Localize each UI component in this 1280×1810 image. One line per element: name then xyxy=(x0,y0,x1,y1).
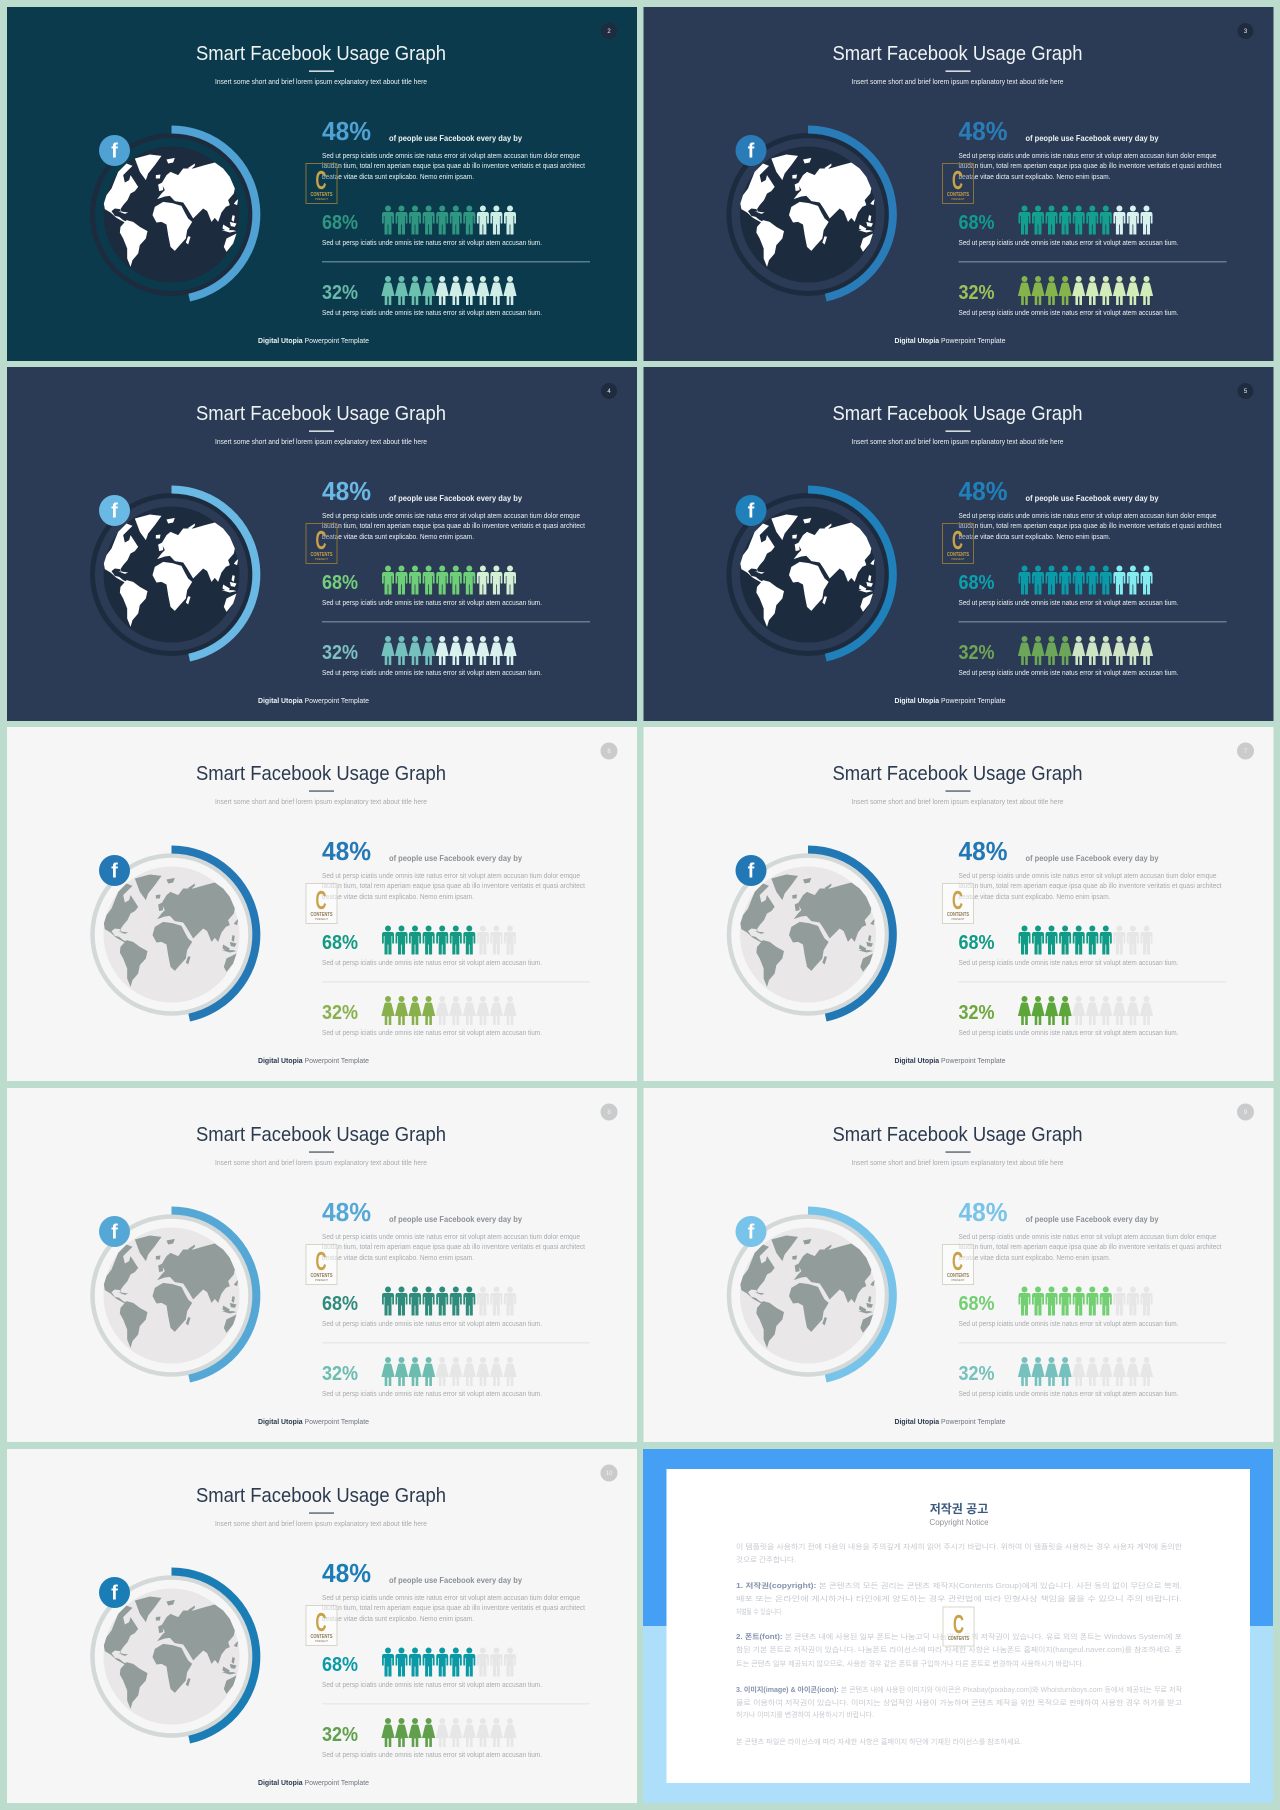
watermark logo: C xyxy=(316,1246,327,1276)
male pictogram row xyxy=(1018,206,1152,234)
32 percent figure: 32% xyxy=(958,1363,995,1385)
male pictogram row xyxy=(1018,926,1152,954)
watermark logo: CONTENTS xyxy=(310,552,333,558)
32 percent caption: Sed ut persp iciatis unde omnis iste natus error sit volupt atem accusan tium. xyxy=(958,1391,1179,1398)
32 percent figure: 32% xyxy=(322,282,358,304)
male pictogram row xyxy=(382,926,516,954)
female pictogram row xyxy=(1018,996,1153,1025)
page number badge: 7 xyxy=(1244,749,1248,755)
subtitle: Insert some short and brief lorem ipsum explanatory text about title here xyxy=(215,1521,427,1528)
footer: Digital Utopia Powerpoint Template xyxy=(894,698,1006,705)
globe donut chart with facebook badge: f xyxy=(748,1222,755,1244)
footer: Digital Utopia Powerpoint Template xyxy=(894,1058,1006,1065)
body paragraph: Sed ut persp iciatis unde omnis iste natus error sit volupt atem accusan tium dolor emque xyxy=(322,513,580,520)
female pictogram row xyxy=(381,1718,517,1747)
body paragraph: beatae vitae dicta sunt explicabo. Nemo enim ipsam. xyxy=(322,174,474,181)
headline: of people use Facebook every day by xyxy=(389,1576,523,1585)
body paragraph xyxy=(322,873,585,901)
watermark logo: PRESENT xyxy=(952,557,965,561)
68 percent figure: 68% xyxy=(322,1654,358,1676)
watermark logo: C xyxy=(952,165,963,195)
title: Smart Facebook Usage Graph xyxy=(196,43,446,65)
globe donut chart with facebook badge: f xyxy=(111,1222,118,1244)
male pictogram row xyxy=(382,1648,516,1676)
page number badge: 3 xyxy=(1244,29,1248,35)
font clause xyxy=(736,1632,1183,1668)
copyright notice panel xyxy=(643,1449,1273,1803)
footer: Digital Utopia Powerpoint Template xyxy=(894,1419,1006,1426)
subtitle: Insert some short and brief lorem ipsum explanatory text about title here xyxy=(852,439,1064,446)
copyright clause: 배포 또는 온라인에 게시하거나 타인에게 양도하는 경우 관련법에 따라 민형사상 책임을 물을 수 있으니 주의 바랍니다. xyxy=(736,1594,1182,1603)
page number badge: 9 xyxy=(1244,1110,1248,1116)
font clause: 트는 콘텐츠 일부 제공되지 않으므로, 사용한 경우 같은 폰트를 구입하거나 다른 폰트로 변경하여 사용하시기 바랍니다. xyxy=(736,1659,1084,1668)
globe donut chart with facebook badge: f xyxy=(748,140,755,162)
globe donut chart with facebook badge xyxy=(92,1210,256,1379)
watermark logo xyxy=(943,1607,974,1646)
body paragraph xyxy=(958,513,1222,541)
watermark logo: PRESENT xyxy=(952,197,965,201)
watermark logo: CONTENTS xyxy=(310,192,333,198)
body paragraph: Sed ut persp iciatis unde omnis iste natus error sit volupt atem accusan tium dolor emque xyxy=(958,873,1217,880)
watermark logo: C xyxy=(316,885,327,915)
globe donut chart with facebook badge xyxy=(92,130,256,298)
subtitle: Insert some short and brief lorem ipsum explanatory text about title here xyxy=(215,439,427,446)
page number badge xyxy=(601,23,617,39)
32 percent figure: 32% xyxy=(958,642,995,664)
body paragraph: laudan tium, total rem aperiam eaque ipsa quae ab illo inventore veritatis et quasi architect xyxy=(958,523,1222,530)
slide 9: light panel, pale blue and green xyxy=(644,1088,1274,1442)
body paragraph: Sed ut persp iciatis unde omnis iste natus error sit volupt atem accusan tium dolor emque xyxy=(322,1595,580,1602)
watermark logo: C xyxy=(952,885,963,915)
headline: of people use Facebook every day by xyxy=(389,1215,523,1224)
68 percent caption: Sed ut persp iciatis unde omnis iste natus error sit volupt atem accusan tium. xyxy=(958,600,1179,607)
image clause: 물로 이용하여 저작권이 있습니다. 이미지는 상업적인 사용이 가능하며 콘텐츠 제작을 위한 목적으로 판매하여 사용한 경우 허가를 받고 xyxy=(736,1698,1183,1707)
closing line: 본 콘텐츠 파일은 라이선스에 따라 자세한 사항은 홈페이지 하단에 기재된 라이선스를 참조하세요. xyxy=(736,1737,1022,1746)
male pictogram row xyxy=(1018,566,1152,594)
watermark logo xyxy=(306,1606,337,1646)
watermark logo: PRESENT xyxy=(315,1278,328,1282)
48 percent figure: 48% xyxy=(958,476,1008,506)
body paragraph xyxy=(958,873,1222,901)
copyright clause xyxy=(736,1581,1182,1616)
watermark logo: CONTENTS xyxy=(310,912,333,918)
slide 10: light panel, blue and cyan xyxy=(7,1449,637,1803)
body paragraph: laudan tium, total rem aperiam eaque ipsa quae ab illo inventore veritatis et quasi architect xyxy=(958,883,1222,890)
page number badge xyxy=(601,383,617,399)
image clause: 허가나 이미지를 변경하여 사용하시기 바랍니다. xyxy=(736,1710,874,1719)
headline: of people use Facebook every day by xyxy=(1026,854,1159,863)
font clause: 함된 기본 폰트로 저작권이 있습니다. 나눔폰트 라이선스에 따라 자세한 사항은 나눔폰트 홈페이지(hangeul.naver.com)를 참조하세요. 폰 xyxy=(736,1645,1183,1654)
watermark logo xyxy=(306,164,337,204)
watermark logo: PRESENT xyxy=(315,197,328,201)
image clause xyxy=(736,1685,1183,1719)
body paragraph xyxy=(322,153,585,181)
watermark logo xyxy=(942,884,974,924)
48 percent figure: 48% xyxy=(322,476,371,506)
globe donut chart with facebook badge: f xyxy=(111,1582,118,1604)
slide 7: light panel, blue and bright green xyxy=(644,727,1274,1081)
notice subheading: Copyright Notice xyxy=(929,1518,989,1527)
body paragraph: Sed ut persp iciatis unde omnis iste natus error sit volupt atem accusan tium dolor emque xyxy=(958,1234,1217,1241)
body paragraph: Sed ut persp iciatis unde omnis iste natus error sit volupt atem accusan tium dolor emque xyxy=(322,873,580,880)
male pictogram row xyxy=(382,1286,516,1316)
headline: of people use Facebook every day by xyxy=(1026,134,1159,143)
page number badge: 2 xyxy=(607,29,611,35)
footer: Digital Utopia Powerpoint Template xyxy=(258,1058,369,1065)
32 percent caption: Sed ut persp iciatis unde omnis iste natus error sit volupt atem accusan tium. xyxy=(958,1030,1179,1037)
footer: Digital Utopia Powerpoint Template xyxy=(258,338,369,345)
page number badge xyxy=(1238,23,1254,39)
female pictogram row xyxy=(1018,636,1153,665)
68 percent caption: Sed ut persp iciatis unde omnis iste natus error sit volupt atem accusan tium. xyxy=(322,240,542,247)
32 percent caption: Sed ut persp iciatis unde omnis iste natus error sit volupt atem accusan tium. xyxy=(322,310,542,317)
body paragraph: beatae vitae dicta sunt explicabo. Nemo enim ipsam. xyxy=(958,894,1111,901)
watermark logo: CONTENTS xyxy=(310,1634,333,1640)
68 percent figure: 68% xyxy=(322,932,358,954)
watermark logo: CONTENTS xyxy=(947,1273,970,1279)
watermark logo: CONTENTS xyxy=(948,1636,970,1642)
subtitle: Insert some short and brief lorem ipsum explanatory text about title here xyxy=(215,79,427,86)
body paragraph: beatae vitae dicta sunt explicabo. Nemo enim ipsam. xyxy=(322,1255,474,1262)
body paragraph xyxy=(322,1234,585,1262)
48 percent figure: 48% xyxy=(958,1197,1008,1227)
page number badge xyxy=(1237,1104,1254,1120)
footer: Digital Utopia Powerpoint Template xyxy=(258,1780,369,1787)
watermark logo xyxy=(306,884,337,924)
body paragraph: laudan tium, total rem aperiam eaque ipsa quae ab illo inventore veritatis et quasi architect xyxy=(322,1244,585,1251)
48 percent figure: 48% xyxy=(322,1558,371,1588)
female pictogram row xyxy=(381,996,517,1025)
68 percent figure: 68% xyxy=(322,1293,358,1315)
watermark logo: C xyxy=(952,525,963,555)
68 percent figure: 68% xyxy=(958,932,995,954)
body paragraph: beatae vitae dicta sunt explicabo. Nemo enim ipsam. xyxy=(958,534,1111,541)
headline: of people use Facebook every day by xyxy=(1026,494,1159,503)
title: Smart Facebook Usage Graph xyxy=(196,763,446,785)
male pictogram row xyxy=(1018,1286,1152,1316)
male pictogram row xyxy=(382,566,516,594)
body paragraph: laudan tium, total rem aperiam eaque ipsa quae ab illo inventore veritatis et quasi architect xyxy=(322,1605,585,1612)
globe donut chart with facebook badge xyxy=(729,850,893,1018)
68 percent figure: 68% xyxy=(958,1293,995,1315)
body paragraph: Sed ut persp iciatis unde omnis iste natus error sit volupt atem accusan tium dolor emque xyxy=(958,153,1217,160)
watermark logo: PRESENT xyxy=(952,917,965,921)
68 percent figure: 68% xyxy=(322,212,358,234)
headline: of people use Facebook every day by xyxy=(389,494,523,503)
body paragraph xyxy=(322,513,585,541)
male pictogram row xyxy=(382,206,516,234)
watermark logo: PRESENT xyxy=(315,917,328,921)
title: Smart Facebook Usage Graph xyxy=(196,403,446,425)
32 percent figure: 32% xyxy=(958,1002,995,1024)
globe donut chart with facebook badge xyxy=(729,1210,893,1379)
32 percent figure: 32% xyxy=(322,1363,358,1385)
title: Smart Facebook Usage Graph xyxy=(196,1485,446,1507)
68 percent caption: Sed ut persp iciatis unde omnis iste natus error sit volupt atem accusan tium. xyxy=(322,1321,542,1328)
48 percent figure: 48% xyxy=(958,836,1008,866)
page number badge xyxy=(1238,383,1254,399)
globe donut chart with facebook badge: f xyxy=(111,500,118,522)
48 percent figure: 48% xyxy=(322,116,371,146)
32 percent caption: Sed ut persp iciatis unde omnis iste natus error sit volupt atem accusan tium. xyxy=(322,1391,542,1398)
32 percent caption: Sed ut persp iciatis unde omnis iste natus error sit volupt atem accusan tium. xyxy=(322,1752,542,1759)
watermark logo xyxy=(942,1244,974,1284)
page number badge xyxy=(1237,742,1254,760)
globe donut chart with facebook badge: f xyxy=(748,500,755,522)
footer: Digital Utopia Powerpoint Template xyxy=(894,338,1006,345)
68 percent caption: Sed ut persp iciatis unde omnis iste natus error sit volupt atem accusan tium. xyxy=(958,240,1179,247)
watermark logo: C xyxy=(952,1246,963,1276)
watermark logo: CONTENTS xyxy=(947,552,970,558)
watermark logo: C xyxy=(316,165,327,195)
title: Smart Facebook Usage Graph xyxy=(832,1124,1082,1146)
page number badge xyxy=(600,1104,618,1120)
female pictogram row xyxy=(1018,276,1153,305)
font clause: 2. 폰트(font): 본 콘텐츠 내에 사용된 일부 폰트는 나눔고딕 나눔명조 등의 저작권이 있습니다. 유료 외의 폰트는 Windows System에 포 xyxy=(736,1632,1183,1641)
watermark logo xyxy=(942,164,974,204)
headline: of people use Facebook every day by xyxy=(1026,1215,1159,1224)
headline: of people use Facebook every day by xyxy=(389,854,523,863)
32 percent figure: 32% xyxy=(958,282,995,304)
globe donut chart with facebook badge: f xyxy=(111,140,118,162)
globe donut chart with facebook badge: f xyxy=(748,860,755,882)
watermark logo xyxy=(942,524,974,564)
page number badge xyxy=(600,1464,618,1482)
watermark logo: C xyxy=(953,1609,964,1639)
48 percent figure: 48% xyxy=(958,116,1008,146)
body paragraph: laudan tium, total rem aperiam eaque ipsa quae ab illo inventore veritatis et quasi architect xyxy=(958,1244,1222,1251)
page number badge: 4 xyxy=(607,389,611,395)
watermark logo: C xyxy=(316,525,327,555)
watermark logo: PRESENT xyxy=(315,557,328,561)
copyright clause: 1. 저작권(copyright): 본 콘텐츠의 모든 권리는 콘텐츠 제작자(Contents Group)에게 있습니다. 사전 동의 없이 무단으로 복제, xyxy=(736,1581,1182,1590)
watermark logo xyxy=(306,1244,337,1284)
page number badge: 10 xyxy=(606,1471,613,1477)
slide 5: navy panel, blue and cyan xyxy=(644,367,1274,721)
watermark logo: CONTENTS xyxy=(947,192,970,198)
68 percent figure: 68% xyxy=(322,572,358,594)
68 percent caption: Sed ut persp iciatis unde omnis iste natus error sit volupt atem accusan tium. xyxy=(958,960,1179,967)
title: Smart Facebook Usage Graph xyxy=(196,1124,446,1146)
watermark logo: CONTENTS xyxy=(310,1273,333,1279)
body paragraph: beatae vitae dicta sunt explicabo. Nemo enim ipsam. xyxy=(322,1616,474,1623)
title: Smart Facebook Usage Graph xyxy=(832,43,1082,65)
body paragraph: laudan tium, total rem aperiam eaque ipsa quae ab illo inventore veritatis et quasi architect xyxy=(322,883,585,890)
body paragraph: Sed ut persp iciatis unde omnis iste natus error sit volupt atem accusan tium dolor emque xyxy=(958,513,1217,520)
68 percent figure: 68% xyxy=(958,212,995,234)
68 percent caption: Sed ut persp iciatis unde omnis iste natus error sit volupt atem accusan tium. xyxy=(322,600,542,607)
globe donut chart with facebook badge xyxy=(729,130,893,298)
subtitle: Insert some short and brief lorem ipsum explanatory text about title here xyxy=(215,799,427,806)
slide 3: navy panel, blue and teal xyxy=(644,7,1274,361)
body paragraph xyxy=(322,1595,585,1623)
intro paragraph: 이 템플릿을 사용하기 전에 다음의 내용을 주의깊게 자세히 읽어 주시기 바랍니다. 위하여 이 템플릿을 사용하는 경우 사용자 계약에 동의한 xyxy=(736,1542,1183,1551)
title: Smart Facebook Usage Graph xyxy=(832,763,1082,785)
headline: of people use Facebook every day by xyxy=(389,134,523,143)
body paragraph: beatae vitae dicta sunt explicabo. Nemo enim ipsam. xyxy=(322,894,474,901)
68 percent caption: Sed ut persp iciatis unde omnis iste natus error sit volupt atem accusan tium. xyxy=(322,1682,542,1689)
32 percent figure: 32% xyxy=(322,642,358,664)
subtitle: Insert some short and brief lorem ipsum explanatory text about title here xyxy=(215,1160,427,1167)
32 percent caption: Sed ut persp iciatis unde omnis iste natus error sit volupt atem accusan tium. xyxy=(322,1030,542,1037)
notice heading: 저작권 공고 xyxy=(930,1501,988,1516)
image clause: 3. 이미지(image) & 아이콘(icon): 본 콘텐츠 내에 사용된 이미지와 아이콘은 Pixabay(pixabay.com)와 Whoisturnboys.com 등에서 제공되는 무료 저작 xyxy=(736,1685,1183,1694)
watermark logo: PRESENT xyxy=(952,1278,965,1282)
48 percent figure: 48% xyxy=(322,1197,371,1227)
globe donut chart with facebook badge xyxy=(729,490,893,658)
slide 8: light panel, sky blue and deep teal xyxy=(7,1088,637,1442)
slide 2: dark teal facebook usage panel xyxy=(7,7,637,361)
copyright clause: 처벌될 수 있습니다. xyxy=(736,1607,783,1616)
68 percent caption: Sed ut persp iciatis unde omnis iste natus error sit volupt atem accusan tium. xyxy=(322,960,542,967)
32 percent figure: 32% xyxy=(322,1724,358,1746)
68 percent caption: Sed ut persp iciatis unde omnis iste natus error sit volupt atem accusan tium. xyxy=(958,1321,1179,1328)
watermark logo: C xyxy=(316,1607,327,1637)
slide 6: light panel, blue and green xyxy=(7,727,637,1081)
32 percent caption: Sed ut persp iciatis unde omnis iste natus error sit volupt atem accusan tium. xyxy=(958,670,1179,677)
body paragraph: Sed ut persp iciatis unde omnis iste natus error sit volupt atem accusan tium dolor emque xyxy=(322,1234,580,1241)
body paragraph: laudan tium, total rem aperiam eaque ipsa quae ab illo inventore veritatis et quasi architect xyxy=(958,163,1222,170)
body paragraph: beatae vitae dicta sunt explicabo. Nemo enim ipsam. xyxy=(958,174,1111,181)
body paragraph: beatae vitae dicta sunt explicabo. Nemo enim ipsam. xyxy=(322,534,474,541)
globe donut chart with facebook badge xyxy=(92,1572,256,1740)
footer: Digital Utopia Powerpoint Template xyxy=(258,1419,369,1426)
body paragraph: laudan tium, total rem aperiam eaque ipsa quae ab illo inventore veritatis et quasi architect xyxy=(322,523,585,530)
watermark logo xyxy=(306,524,337,564)
subtitle: Insert some short and brief lorem ipsum explanatory text about title here xyxy=(852,1160,1064,1167)
32 percent caption: Sed ut persp iciatis unde omnis iste natus error sit volupt atem accusan tium. xyxy=(958,310,1179,317)
female pictogram row xyxy=(381,276,517,305)
female pictogram row xyxy=(1018,1357,1153,1386)
32 percent figure: 32% xyxy=(322,1002,358,1024)
globe donut chart with facebook badge xyxy=(92,490,256,658)
page number badge: 8 xyxy=(607,1110,611,1116)
page number badge xyxy=(600,742,618,760)
68 percent figure: 68% xyxy=(958,572,995,594)
page number badge: 6 xyxy=(607,749,611,755)
subtitle: Insert some short and brief lorem ipsum explanatory text about title here xyxy=(852,799,1064,806)
intro paragraph: 것으로 간주합니다. xyxy=(736,1555,796,1564)
body paragraph: beatae vitae dicta sunt explicabo. Nemo enim ipsam. xyxy=(958,1255,1111,1262)
slide 4: navy panel, light blue and green xyxy=(7,367,637,721)
intro paragraph xyxy=(736,1542,1183,1564)
watermark logo: PRESENT xyxy=(315,1639,328,1643)
globe donut chart with facebook badge: f xyxy=(111,860,118,882)
32 percent caption: Sed ut persp iciatis unde omnis iste natus error sit volupt atem accusan tium. xyxy=(322,670,542,677)
globe donut chart with facebook badge xyxy=(92,850,256,1018)
body paragraph: laudan tium, total rem aperiam eaque ipsa quae ab illo inventore veritatis et quasi architect xyxy=(322,163,585,170)
page number badge: 5 xyxy=(1244,389,1248,395)
female pictogram row xyxy=(381,636,517,665)
title: Smart Facebook Usage Graph xyxy=(832,403,1082,425)
48 percent figure: 48% xyxy=(322,836,371,866)
watermark logo: CONTENTS xyxy=(947,912,970,918)
female pictogram row xyxy=(381,1357,517,1386)
footer: Digital Utopia Powerpoint Template xyxy=(258,698,369,705)
body paragraph xyxy=(958,153,1222,181)
body paragraph: Sed ut persp iciatis unde omnis iste natus error sit volupt atem accusan tium dolor emque xyxy=(322,153,580,160)
body paragraph xyxy=(958,1234,1222,1262)
subtitle: Insert some short and brief lorem ipsum explanatory text about title here xyxy=(852,79,1064,86)
